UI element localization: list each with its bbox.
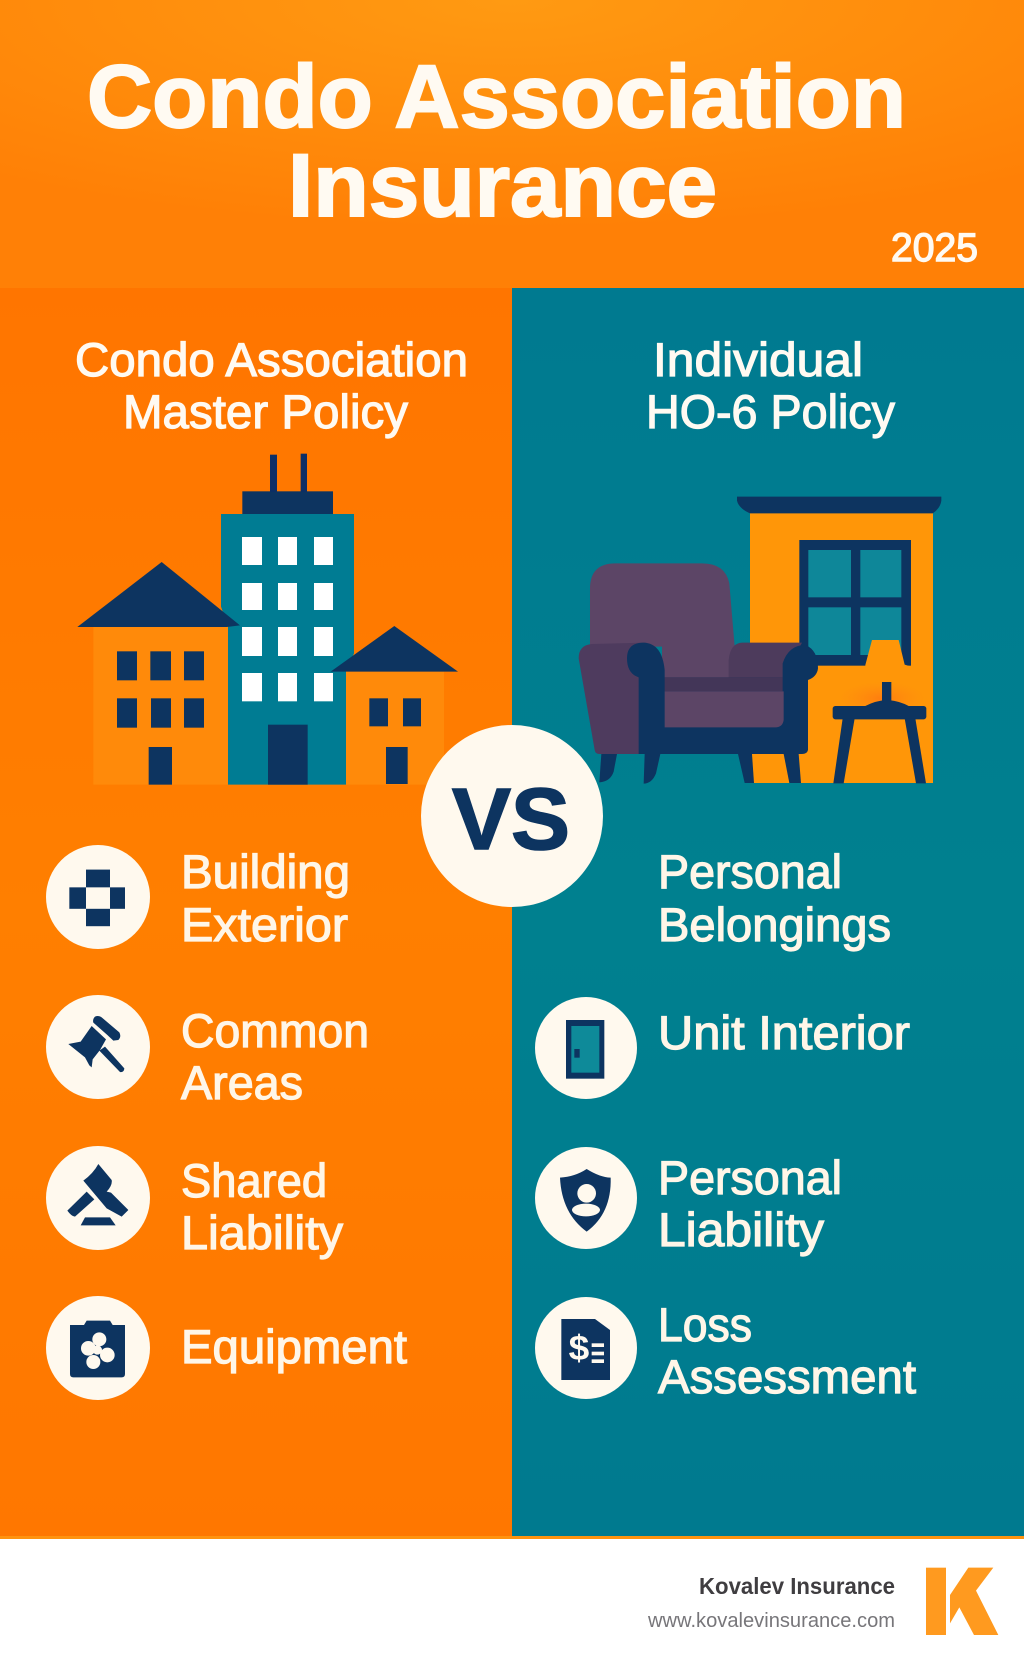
icon: invoice document (535, 1297, 637, 1399)
title: Condo Association (87, 46, 906, 146)
item: personal liability (535, 1147, 842, 1256)
item: shared liability (46, 1146, 344, 1259)
item: loss assessment: Assessment (658, 1350, 916, 1403)
icon: fan unit (46, 1296, 150, 1400)
title: Insurance (288, 135, 717, 235)
panel: HO-6 policy background (512, 288, 1024, 1536)
icon: invoice document: $ (569, 1329, 589, 1368)
illustration: condo buildings (77, 454, 458, 785)
heading: HO-6 policy: HO-6 Policy (646, 385, 895, 438)
item: common areas (46, 995, 369, 1109)
item: equipment: Equipment (181, 1320, 407, 1373)
item: shared liability: Shared (181, 1154, 327, 1207)
title (87, 46, 906, 235)
item: loss assessment (535, 1297, 916, 1403)
item: building exterior: Building (181, 845, 350, 898)
item: loss assessment: Loss (658, 1298, 752, 1351)
icon: shield with person (535, 1147, 637, 1249)
item: unit interior: Unit Interior (658, 1006, 910, 1059)
item: common areas: Common (181, 1004, 369, 1057)
item: building exterior (46, 845, 350, 951)
item: shared liability: Liability (181, 1206, 344, 1259)
footer brand text: www.kovalevinsurance.com (647, 1610, 895, 1632)
icon: judge hammer (46, 1146, 150, 1250)
header band (0, 0, 1024, 288)
item: personal belongings (658, 845, 891, 951)
item: building exterior: Exterior (181, 898, 348, 951)
heading: master policy: Condo Association (75, 333, 468, 386)
item: personal liability: Liability (658, 1203, 825, 1256)
icon: gavel (46, 995, 150, 1099)
item: unit interior (535, 997, 910, 1099)
footer band (0, 1536, 1024, 1666)
VS badge (421, 725, 603, 907)
item: personal belongings: Personal (658, 845, 842, 898)
icon: building exterior (46, 845, 150, 949)
icon: door (535, 997, 637, 1099)
item: common areas: Areas (181, 1056, 303, 1109)
heading: HO-6 policy (646, 333, 895, 438)
heading: master policy: Master Policy (123, 385, 408, 438)
footer brand text: Kovalev Insurance (699, 1573, 895, 1599)
heading: HO-6 policy: Individual (653, 333, 863, 386)
item: personal belongings: Belongings (658, 898, 891, 951)
year label: 2025 (891, 226, 978, 270)
item: personal liability: Personal (658, 1151, 842, 1204)
illustration: armchair in room (579, 497, 941, 784)
footer brand text (647, 1573, 895, 1632)
heading: master policy (75, 333, 468, 438)
logo: K mark (926, 1568, 998, 1635)
panel: master policy background (0, 288, 512, 1536)
item: equipment (46, 1296, 407, 1400)
VS badge: VS (452, 771, 570, 868)
